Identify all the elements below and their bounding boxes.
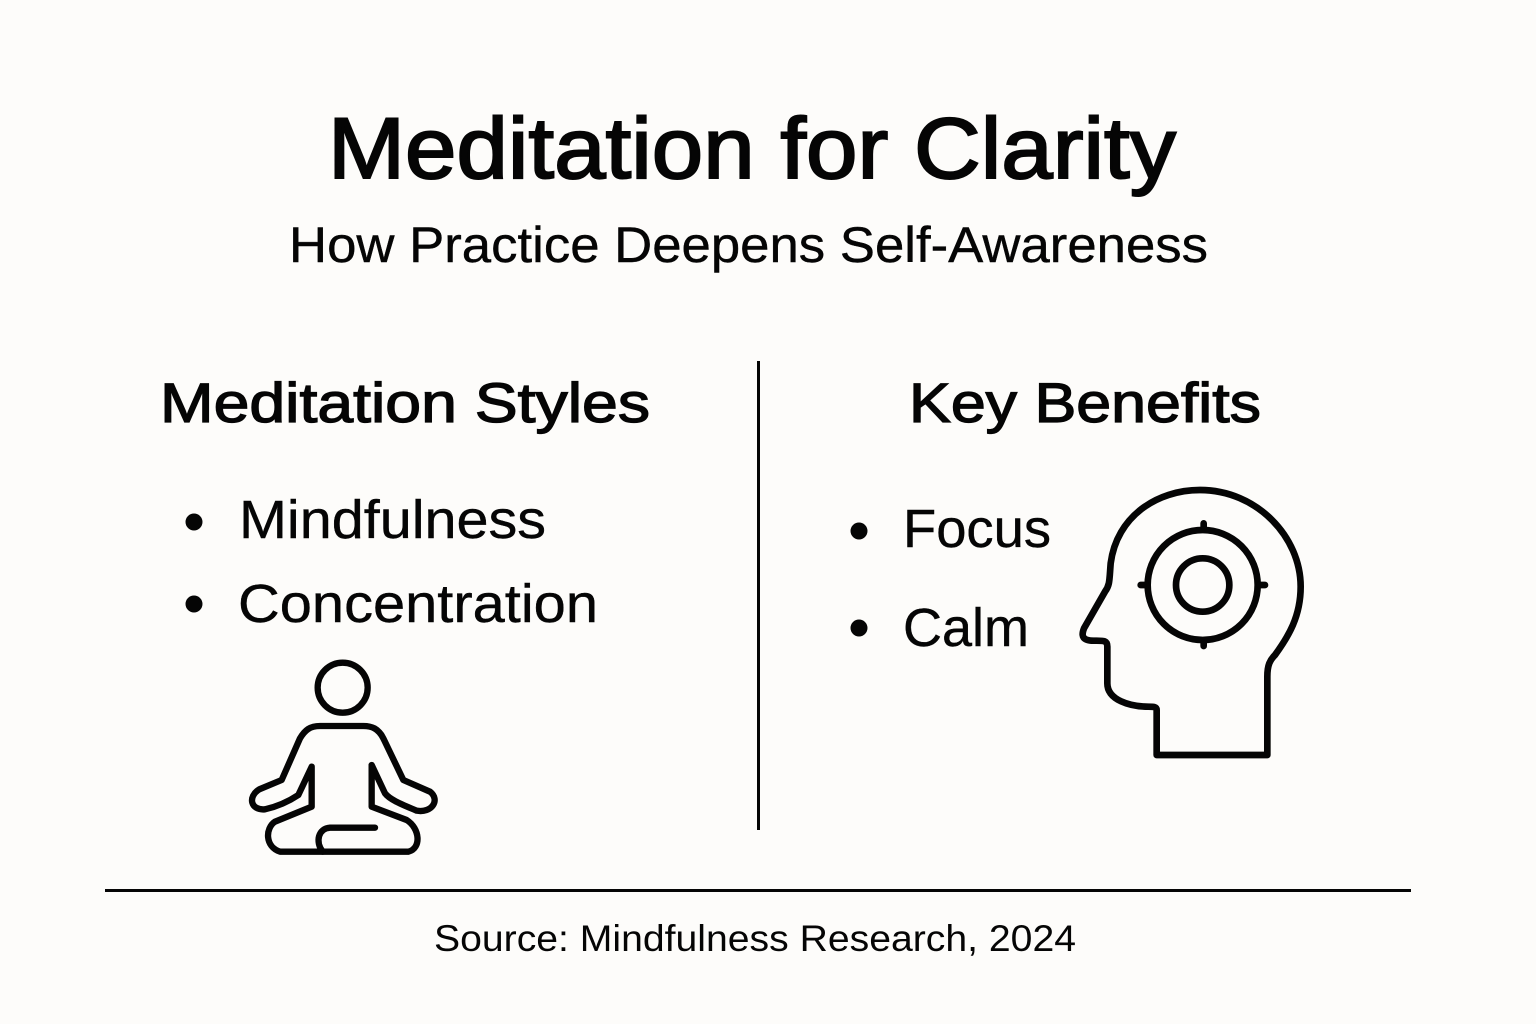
heading: meditation styles: Meditation Styles [160, 371, 650, 434]
source note: Source: Mindfulness Research, 2024 [434, 918, 1076, 959]
icon: head with target [1083, 490, 1301, 755]
subtitle: How Practice Deepens Self-Awareness [289, 217, 1208, 273]
footer rule [105, 889, 1411, 892]
bullet list: styles: Concentration [238, 574, 598, 634]
icon: meditating figure [252, 663, 435, 852]
bullet list: styles: Mindfulness [239, 490, 546, 550]
bullet list: benefits: Calm [903, 598, 1029, 658]
title: Meditation for Clarity [328, 101, 1176, 197]
panel: key benefits [850, 371, 1301, 755]
bullet list: benefits: Focus [903, 499, 1051, 559]
panel: meditation styles [160, 371, 650, 852]
bullet list: benefits [850, 499, 1051, 658]
center divider [757, 361, 760, 830]
bullet list: styles [186, 490, 598, 634]
heading: key benefits: Key Benefits [909, 371, 1261, 434]
